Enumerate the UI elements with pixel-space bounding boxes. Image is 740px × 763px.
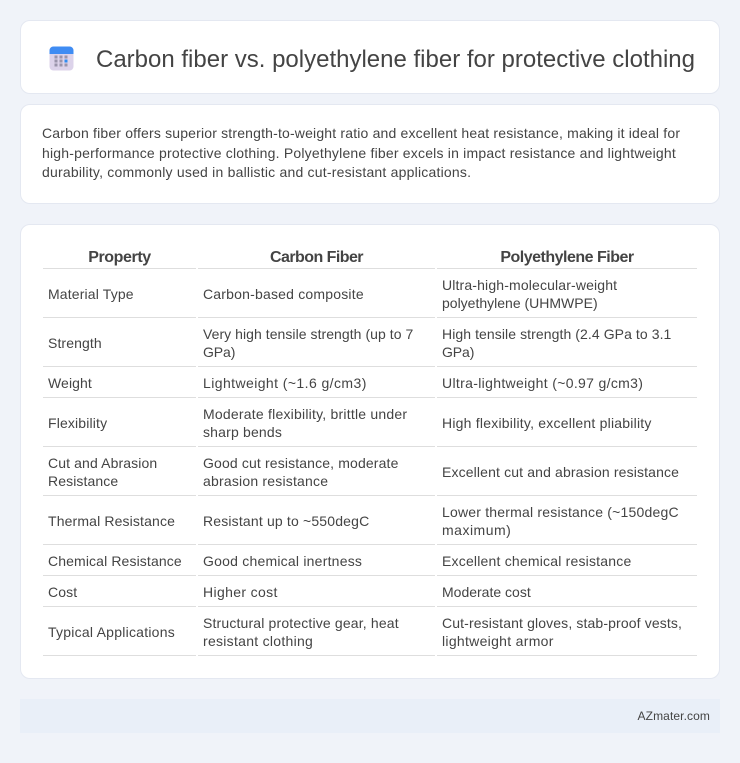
comparison table: Thermal Resistance (48, 513, 175, 529)
column header: Property: Property (88, 249, 151, 266)
comparison table: Flexibility (48, 415, 107, 431)
comparison table: Very high tensile strength (up to 7 (203, 326, 413, 342)
comparison table: lightweight armor (442, 633, 554, 649)
comparison table: Good chemical inertness (203, 553, 362, 569)
row: Cost (48, 584, 531, 600)
panel: summary card (20, 104, 720, 204)
row: Strength (48, 326, 671, 360)
summary text: high-performance protective clothing. Polyethylene fiber excels in impact resistance and lightweight (42, 144, 676, 160)
comparison table: Chemical Resistance (48, 553, 182, 569)
comparison table: Higher cost (203, 584, 278, 600)
comparison table: abrasion resistance (203, 473, 328, 489)
row: Material Type (48, 277, 617, 311)
summary text (42, 125, 680, 180)
comparison table: Resistance (48, 473, 118, 489)
row: Thermal Resistance (48, 504, 679, 538)
summary text: durability, commonly used in ballistic and cut-resistant applications. (42, 164, 471, 180)
row: Cut and Abrasion Resistance (48, 455, 679, 489)
comparison table: Cut and Abrasion (48, 455, 157, 471)
summary text: Carbon fiber offers superior strength-to-weight ratio and excellent heat resistance, making it ideal for (42, 125, 680, 141)
footer bar (20, 699, 720, 733)
row: Weight (48, 375, 643, 391)
comparison table: GPa) (203, 344, 235, 360)
comparison table: maximum) (442, 522, 511, 538)
comparison table: High tensile strength (2.4 GPa to 3.1 (442, 326, 671, 342)
panel: title card (20, 20, 720, 94)
column header: Polyethylene Fiber: Polyethylene Fiber (500, 249, 634, 266)
comparison table: sharp bends (203, 424, 282, 440)
comparison table: Typical Applications (48, 624, 175, 640)
comparison table: Resistant up to ~550degC (203, 513, 369, 529)
comparison table: Weight (48, 375, 92, 391)
comparison table: Lightweight (~1.6 g/cm3) (203, 375, 367, 391)
comparison table: Cut-resistant gloves, stab-proof vests, (442, 615, 682, 631)
comparison table: Ultra-lightweight (~0.97 g/cm3) (442, 375, 643, 391)
comparison table: Strength (48, 335, 102, 351)
icon: calendar (50, 46, 74, 70)
panel: comparison table card (20, 224, 720, 679)
column header: Carbon Fiber: Carbon Fiber (270, 249, 363, 266)
comparison table: Good cut resistance, moderate (203, 455, 398, 471)
row: Typical Applications (48, 615, 682, 649)
comparison table: Carbon-based composite (203, 286, 364, 302)
comparison table: Excellent chemical resistance (442, 553, 631, 569)
title: Carbon fiber vs. polyethylene fiber for protective clothing (96, 46, 695, 73)
comparison table: polyethylene (UHMWPE) (442, 295, 598, 311)
comparison table: Lower thermal resistance (~150degC (442, 504, 679, 520)
comparison table: Ultra-high-molecular-weight (442, 277, 617, 293)
row: Chemical Resistance (48, 553, 631, 569)
comparison table: Structural protective gear, heat (203, 615, 399, 631)
comparison table: Cost (48, 584, 77, 600)
comparison table: Excellent cut and abrasion resistance (442, 464, 679, 480)
row: Flexibility (48, 406, 652, 440)
footer brand text: AZmater.com (638, 709, 710, 723)
comparison table: High flexibility, excellent pliability (442, 415, 652, 431)
comparison table: Moderate cost (442, 584, 531, 600)
comparison table: GPa) (442, 344, 474, 360)
comparison table: resistant clothing (203, 633, 313, 649)
comparison table: Moderate flexibility, brittle under (203, 406, 407, 422)
comparison table: Material Type (48, 286, 134, 302)
